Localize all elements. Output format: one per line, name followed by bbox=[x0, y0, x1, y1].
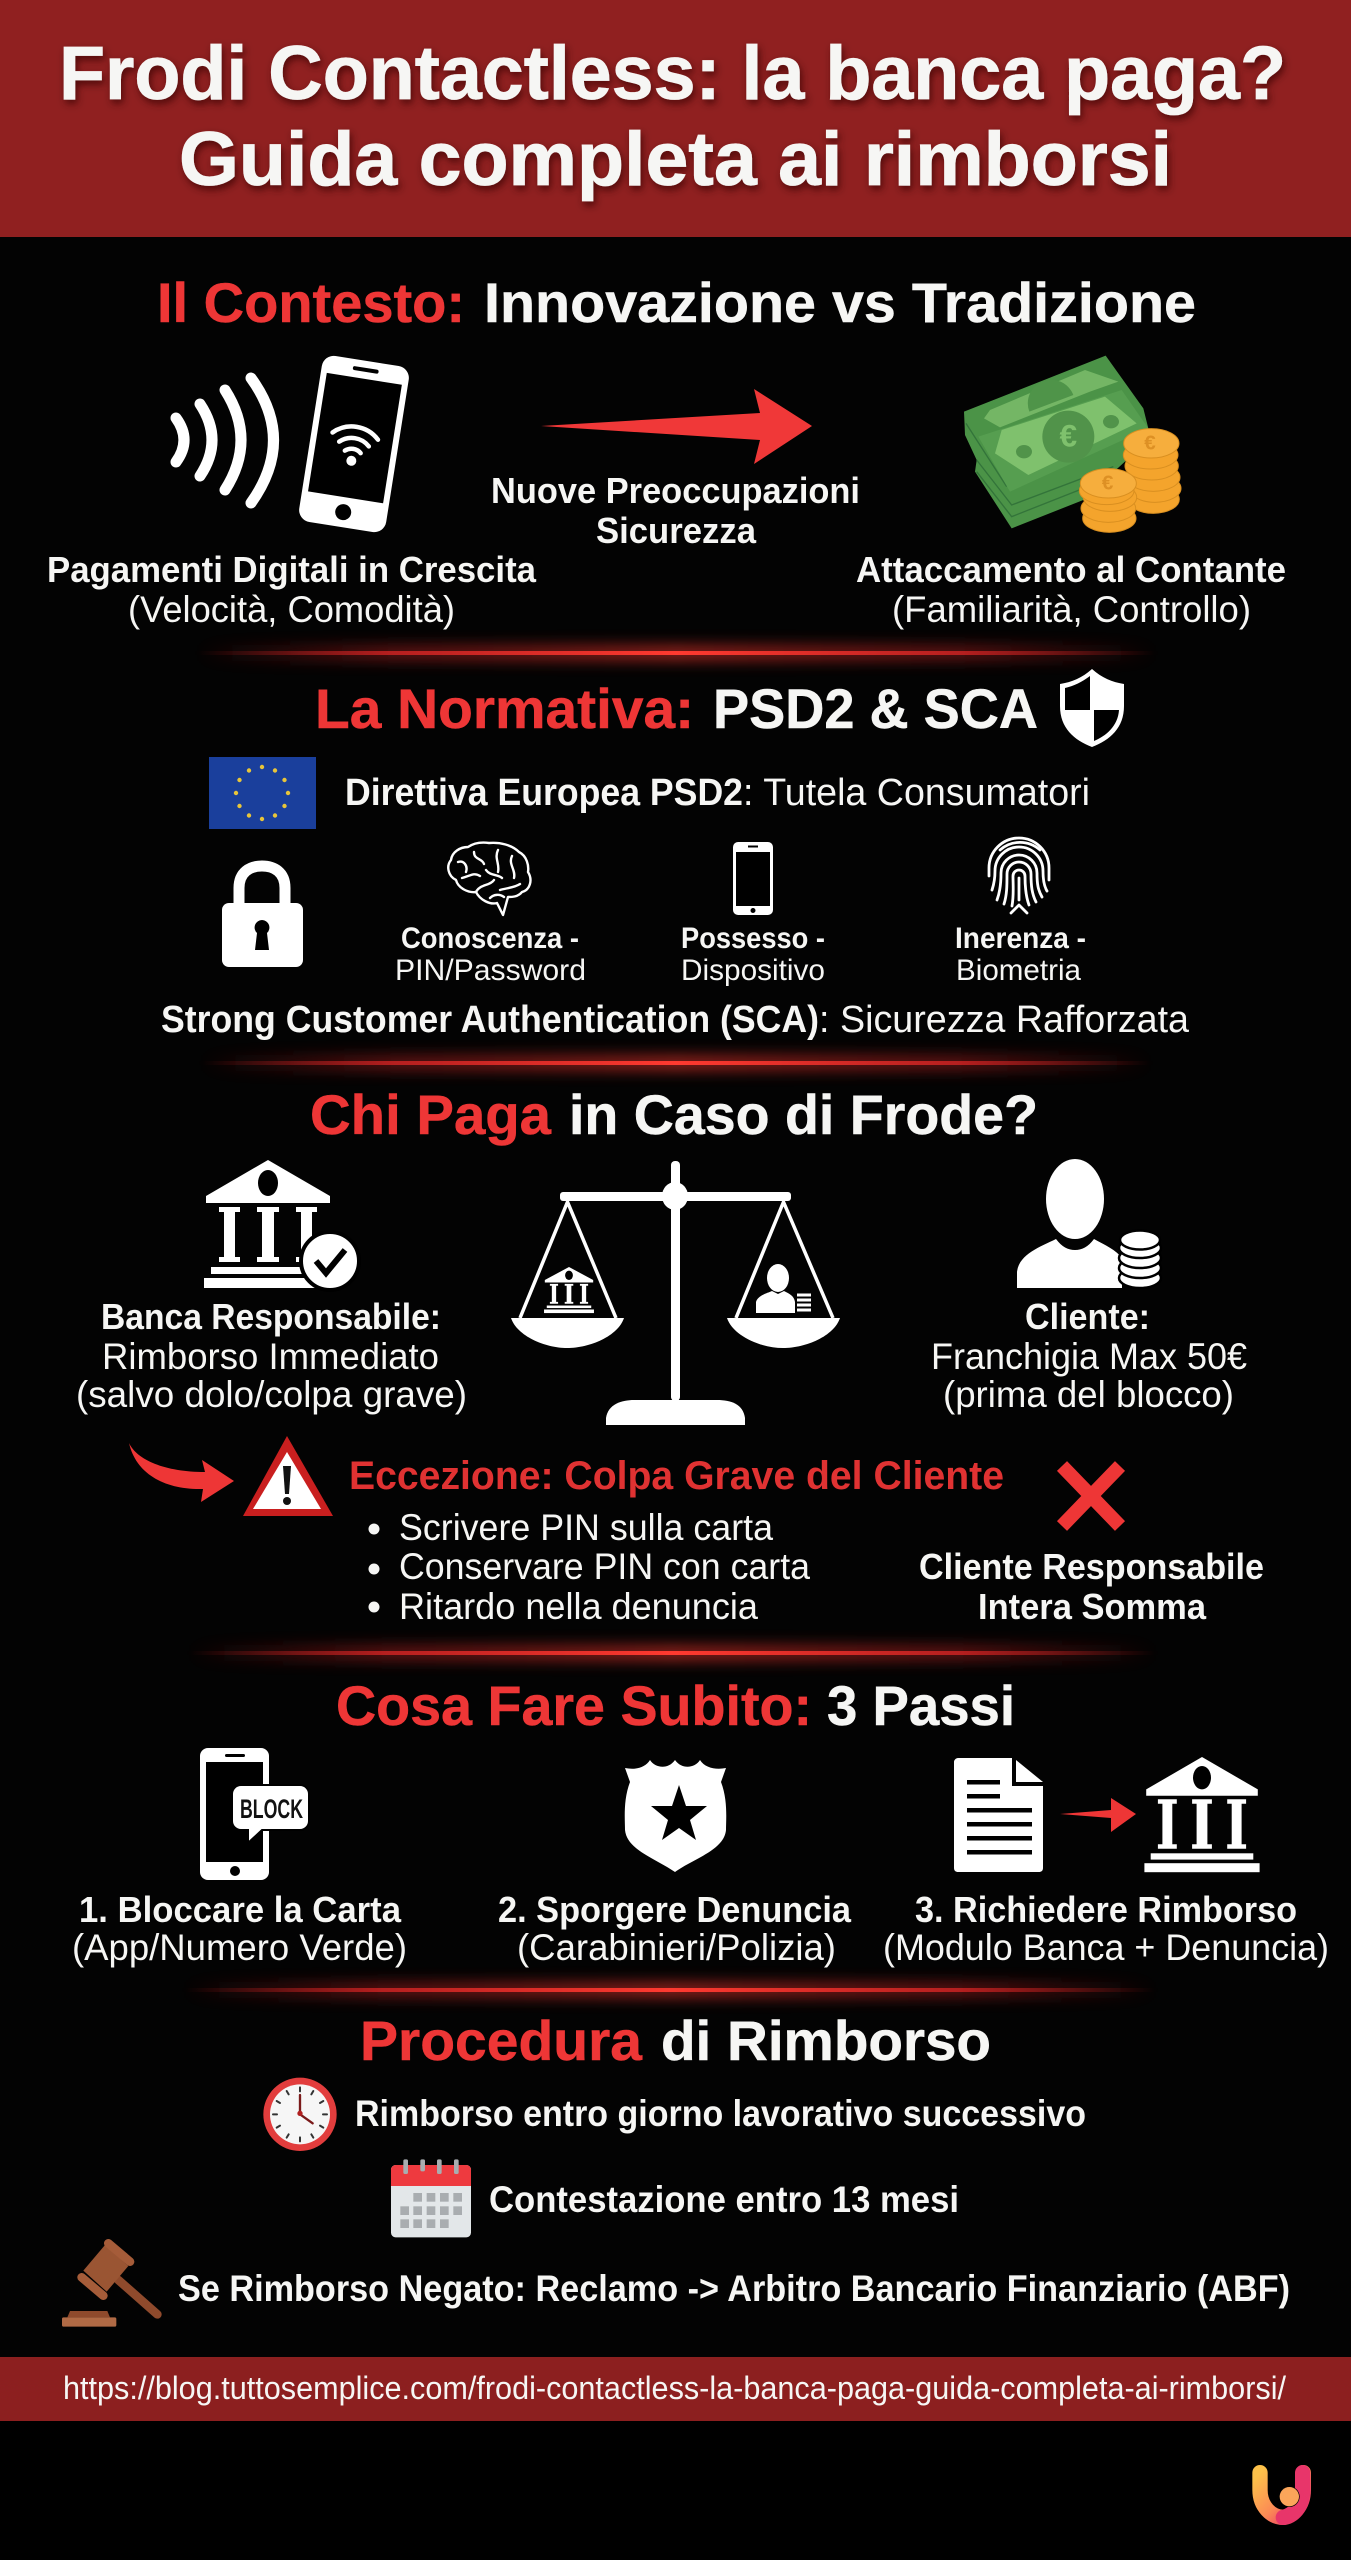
icon: warning triangle bbox=[243, 1436, 333, 1516]
icon: gavel bbox=[62, 2243, 157, 2327]
heading: eccezione: Eccezione: Colpa Grave del Cliente bbox=[349, 1454, 1004, 1498]
section: procedura di rimborso bbox=[62, 2009, 1290, 2327]
icon: brain bbox=[448, 843, 530, 915]
heading: il contesto bbox=[157, 271, 1196, 334]
icon: fingerprint bbox=[989, 838, 1049, 913]
icon: padlock bbox=[222, 866, 303, 967]
list: colpa grave examples: Scrivere PIN sulla carta bbox=[399, 1507, 773, 1548]
icon: shield bbox=[1060, 669, 1124, 747]
bottom black area bbox=[0, 2421, 1351, 2560]
arrow: curved red bbox=[129, 1443, 234, 1502]
section: il contesto bbox=[47, 271, 1286, 630]
text: strong customer authentication: Strong Customer Authentication (SCA) bbox=[161, 999, 819, 1041]
icon: cash and coins: € bbox=[1060, 418, 1078, 454]
footer band with url bbox=[0, 2357, 1351, 2421]
text: nuove preoccupazioni bbox=[491, 470, 860, 551]
icon: EU flag bbox=[209, 757, 316, 829]
icon: balance scale bbox=[511, 1161, 840, 1425]
header banner bbox=[0, 0, 1351, 237]
text: step 3: 3. Richiedere Rimborso bbox=[915, 1889, 1297, 1930]
icon: phone with block bubble: BLOCK bbox=[240, 1794, 303, 1824]
text: cliente responsabile: Intera Somma bbox=[978, 1586, 1207, 1627]
icon: cash and coins bbox=[964, 356, 1181, 532]
text: cliente franchigia: Franchigia Max 50€ bbox=[931, 1336, 1247, 1377]
icon: bank bbox=[1144, 1757, 1260, 1872]
icon: phone outline bbox=[733, 842, 773, 915]
text: direttiva europea: : Tutela Consumatori bbox=[743, 772, 1090, 814]
icon: police badge bbox=[625, 1760, 726, 1872]
text: inerenza bbox=[955, 922, 1086, 987]
text: nuove preoccupazioni: Nuove Preoccupazioni bbox=[491, 470, 860, 511]
heading: la normativa: PSD2 & SCA bbox=[713, 677, 1038, 740]
text: contestazione: Contestazione entro 13 mesi bbox=[489, 2179, 959, 2220]
text: possesso: Dispositivo bbox=[681, 954, 825, 987]
icon: contactless waves bbox=[176, 378, 274, 503]
text: step 2: (Carabinieri/Polizia) bbox=[517, 1927, 836, 1968]
logo bbox=[1260, 2473, 1303, 2517]
text: banca responsabile: (salvo dolo/colpa grave) bbox=[76, 1374, 467, 1415]
text: inerenza: Biometria bbox=[956, 954, 1081, 987]
heading: il contesto: Innovazione vs Tradizione bbox=[484, 271, 1196, 334]
section: cosa fare subito bbox=[72, 1674, 1329, 1968]
text: strong customer authentication: : Sicurezza Rafforzata bbox=[819, 999, 1190, 1041]
heading: procedura: Procedura bbox=[360, 2009, 643, 2072]
text: possesso: Possesso - bbox=[681, 922, 825, 955]
text: step 1: (App/Numero Verde) bbox=[72, 1927, 407, 1968]
text: banca responsabile: Rimborso Immediato bbox=[102, 1336, 439, 1377]
icon: clock bbox=[263, 2078, 337, 2151]
text: attaccamento al contante: (Familiarità, Controllo) bbox=[892, 589, 1251, 630]
text: cliente franchigia: Cliente: bbox=[1025, 1296, 1150, 1337]
text: conoscenza: Conoscenza - bbox=[401, 922, 579, 955]
text: rimborso entro: Rimborso entro giorno lavorativo successivo bbox=[355, 2093, 1086, 2134]
text: cliente franchigia: (prima del blocco) bbox=[943, 1374, 1234, 1415]
title: Guida completa ai rimborsi bbox=[179, 117, 1172, 202]
text: attaccamento al contante: Attaccamento al Contante bbox=[856, 549, 1286, 590]
icon: calendar bbox=[391, 2159, 471, 2237]
list: colpa grave examples: Conservare PIN con carta bbox=[399, 1546, 810, 1587]
text: se rimborso negato: Se Rimborso Negato: Reclamo -> Arbitro Bancario Finanziario (ABF) bbox=[178, 2268, 1290, 2309]
text: step 2 bbox=[498, 1889, 852, 1968]
text: conoscenza: PIN/Password bbox=[395, 954, 586, 987]
text: attaccamento al contante bbox=[856, 549, 1286, 630]
text: banca responsabile bbox=[76, 1296, 467, 1415]
text: direttiva europea: Direttiva Europea PSD2 bbox=[345, 772, 743, 814]
icon: phone with block bubble bbox=[200, 1748, 309, 1880]
text: step 2: 2. Sporgere Denuncia bbox=[498, 1889, 852, 1930]
list: colpa grave examples: Ritardo nella denuncia bbox=[399, 1586, 758, 1627]
text: cliente responsabile: Cliente Responsabile bbox=[919, 1546, 1264, 1587]
heading: procedura bbox=[360, 2009, 991, 2072]
heading: chi paga bbox=[310, 1083, 1038, 1146]
text: pagamenti digitali: Pagamenti Digitali in Crescita bbox=[47, 549, 537, 590]
section: la normativa bbox=[161, 669, 1190, 1041]
text: banca responsabile: Banca Responsabile: bbox=[101, 1296, 441, 1337]
footer band with url: https://blog.tuttosemplice.com/frodi-contactless-la-banca-paga-guida-completa-ai-rimborsi/ bbox=[63, 2370, 1286, 2406]
icon: red X bbox=[1062, 1466, 1120, 1526]
text: pagamenti digitali: (Velocità, Comodità) bbox=[128, 589, 455, 630]
icon: document bbox=[954, 1758, 1043, 1872]
list: colpa grave examples bbox=[368, 1507, 810, 1627]
heading: la normativa bbox=[315, 677, 1038, 740]
text: strong customer authentication bbox=[161, 999, 1190, 1041]
heading: cosa fare subito: 3 Passi bbox=[827, 1674, 1015, 1737]
text: step 1 bbox=[72, 1889, 407, 1968]
text: pagamenti digitali bbox=[47, 549, 537, 630]
arrow: red transition arrow bbox=[541, 389, 812, 464]
text: step 1: 1. Bloccare la Carta bbox=[79, 1889, 402, 1930]
text: conoscenza bbox=[395, 922, 586, 987]
icon: client with coins bbox=[1017, 1159, 1161, 1288]
arrow: document to bank bbox=[1060, 1798, 1136, 1832]
heading: il contesto: Il Contesto: bbox=[157, 271, 465, 334]
icon: cash and coins: € bbox=[1102, 471, 1114, 494]
title bbox=[59, 31, 1286, 202]
section: chi paga bbox=[76, 1083, 1264, 1627]
icon: bank with check bbox=[204, 1160, 359, 1290]
text: step 3: (Modulo Banca + Denuncia) bbox=[883, 1927, 1329, 1968]
text: inerenza: Inerenza - bbox=[955, 922, 1086, 955]
icon: smartphone with wifi bbox=[297, 354, 411, 534]
heading: procedura: di Rimborso bbox=[661, 2009, 991, 2072]
text: cliente responsabile bbox=[919, 1546, 1264, 1627]
heading: chi paga: Chi Paga bbox=[310, 1083, 552, 1146]
icon: cash and coins: € bbox=[1144, 431, 1156, 454]
title: Frodi Contactless: la banca paga? bbox=[59, 31, 1286, 116]
text: step 3 bbox=[883, 1889, 1329, 1968]
heading: la normativa: La Normativa: bbox=[315, 677, 694, 740]
text: possesso bbox=[681, 922, 825, 987]
heading: chi paga: in Caso di Frode? bbox=[569, 1083, 1038, 1146]
text: nuove preoccupazioni: Sicurezza bbox=[596, 510, 757, 551]
text: cliente franchigia bbox=[931, 1296, 1247, 1415]
heading: cosa fare subito: Cosa Fare Subito: bbox=[336, 1674, 812, 1737]
text: direttiva europea bbox=[345, 772, 1090, 814]
